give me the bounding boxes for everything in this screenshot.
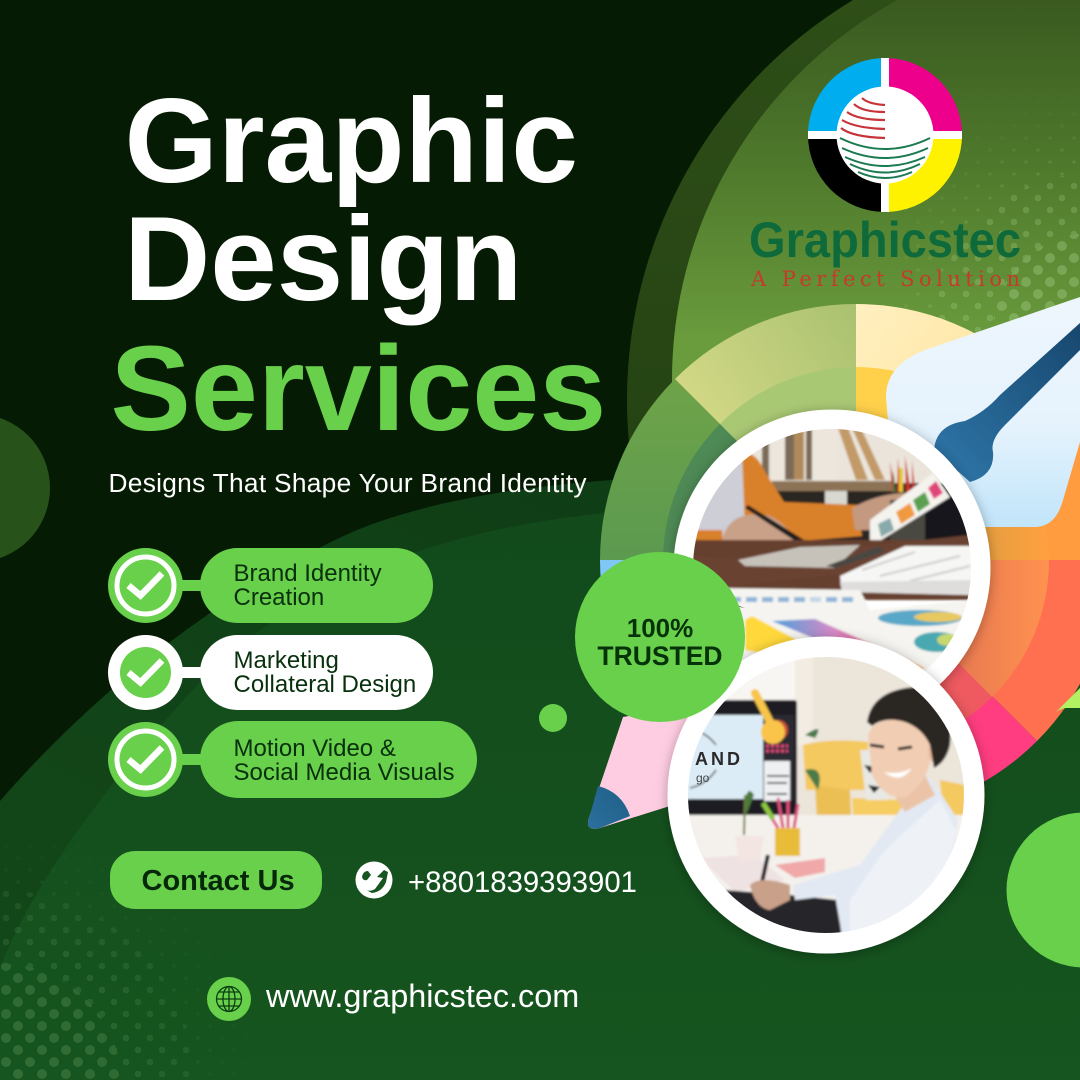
pen nib	[886, 297, 1080, 527]
title: Design	[124, 193, 522, 326]
decorative circle: right edge	[1006, 812, 1080, 968]
light green sliver behind wheel	[1056, 688, 1080, 712]
photo circle: smiling designer with monitor	[668, 636, 984, 954]
badge: 100% trusted: TRUSTED	[597, 641, 723, 671]
website: www.graphicstec.com	[265, 978, 579, 1014]
photo circle: smiling designer with monitor: AND	[695, 749, 743, 769]
company logo	[749, 58, 1021, 291]
logo emblem: CMYK ring with globe	[808, 58, 962, 212]
photo circle: smiling designer with monitor: go	[696, 771, 710, 785]
logo wordmark: Graphicstec	[749, 212, 1021, 268]
icon: phone	[356, 862, 392, 898]
icon: globe	[207, 977, 251, 1021]
list item: marketing collateral	[108, 635, 433, 710]
list item: brand identity: Creation	[234, 584, 324, 611]
decorative dot	[539, 704, 567, 732]
list item: brand identity: Brand Identity	[234, 560, 382, 587]
list item: marketing collateral: Collateral Design	[234, 671, 416, 698]
photo circle: designer at desk	[674, 410, 990, 726]
halftone dots: bottom left	[1, 882, 200, 1079]
pencil	[588, 700, 720, 829]
colour wheel	[600, 304, 1080, 816]
title: Services	[110, 321, 606, 456]
list item: motion video: Motion Video &	[234, 735, 396, 762]
title: Graphic	[124, 74, 578, 208]
phone number: +8801839393901	[408, 866, 637, 899]
list item: marketing collateral: Marketing	[234, 647, 339, 674]
subtitle: Designs That Shape Your Brand Identity	[108, 468, 587, 498]
list item: motion video	[108, 721, 477, 798]
decorative circle: left edge	[0, 414, 50, 562]
contact button	[110, 851, 322, 909]
badge: 100% trusted	[575, 552, 745, 722]
list item: brand identity	[108, 548, 433, 623]
logo tagline: A Perfect Solution	[750, 267, 1020, 291]
badge: 100% trusted: 100%	[627, 613, 693, 643]
title	[110, 74, 606, 456]
shadow crescent under badge	[677, 553, 745, 608]
halftone dots: top right	[904, 136, 1079, 332]
list item: motion video: Social Media Visuals	[234, 759, 455, 786]
contact button: Contact Us	[142, 865, 295, 897]
top right arcs: dark ring and large green disc	[627, 0, 1080, 442]
